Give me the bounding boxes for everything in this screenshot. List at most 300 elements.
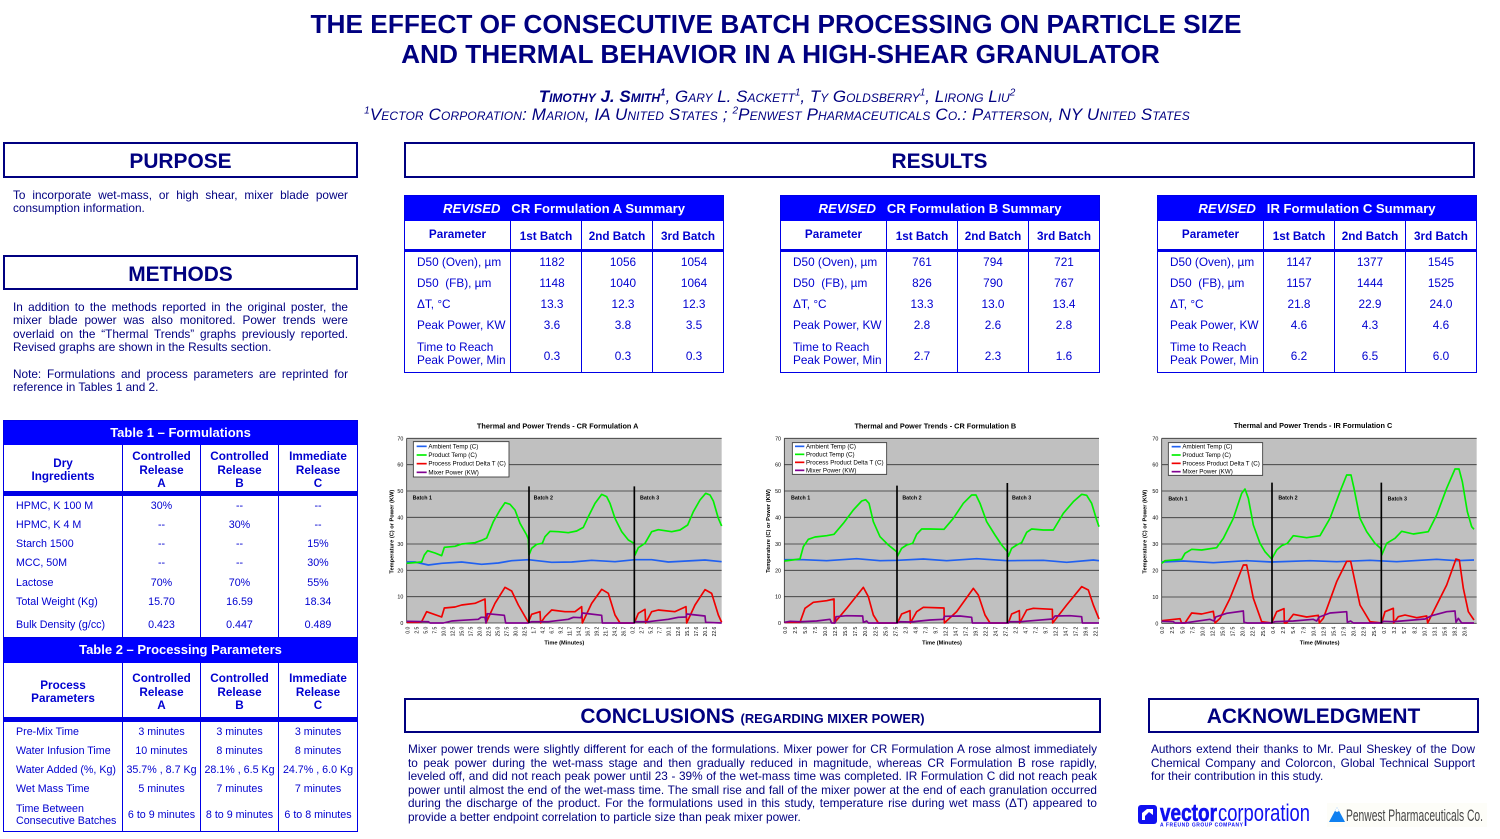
table: IR Formulation C summary: D50 (FB), µm	[1170, 276, 1244, 290]
chart: IR Formulation C: 10.4	[1311, 626, 1317, 636]
chart: CR Formulation B: 20.0	[863, 626, 869, 636]
chart: IR Formulation C: 3.2	[1392, 626, 1398, 634]
table 1: formulations: 30%	[151, 500, 172, 512]
chart: CR Formulation B: 9.7	[1044, 626, 1050, 634]
table 1: formulations: --	[236, 557, 243, 569]
table: IR Formulation C summary: Peak Power, Min	[1170, 353, 1259, 367]
chart: CR Formulation B: 2.3	[903, 626, 909, 634]
table 1: formulations: 16.59	[226, 596, 253, 608]
table: CR Formulation A summary: Peak Power, Min	[417, 353, 506, 367]
chart: CR Formulation A: 0	[400, 621, 403, 627]
chart: CR Formulation A: 5.2	[649, 626, 655, 634]
table: CR Formulation A summary: 1054	[681, 255, 707, 269]
table 1: formulations: 0.447	[226, 618, 253, 630]
chart: IR Formulation C: 60	[1152, 463, 1158, 469]
table: IR Formulation C summary: 1157	[1286, 276, 1312, 290]
table: CR Formulation B summary: 13.4	[1053, 297, 1075, 311]
chart: CR Formulation A: 15.1	[685, 626, 691, 636]
table 1: formulations	[3, 420, 358, 638]
chart: CR Formulation B: 22.1	[1094, 626, 1100, 636]
chart: CR Formulation A: 12.6	[676, 626, 682, 636]
chart: CR Formulation B: 12.5	[833, 626, 839, 636]
chart: CR Formulation A: 12.5	[450, 626, 456, 636]
table 2: processing parameters: C	[314, 699, 322, 712]
table: CR Formulation B summary: Parameter	[805, 228, 862, 241]
chart: CR Formulation A: 24.2	[613, 626, 619, 636]
chart: IR Formulation C: Temperature (C) or Power (KW)	[1142, 490, 1148, 574]
title: THE EFFECT OF CONSECUTIVE BATCH PROCESSING ON PARTICLE SIZE	[311, 9, 1241, 39]
chart: CR Formulation B: 2.5	[793, 626, 799, 634]
chart: CR Formulation B: Batch 2	[902, 495, 922, 501]
chart: IR Formulation C: 12.9	[1321, 626, 1327, 636]
chart: CR Formulation A: 60	[397, 463, 403, 469]
chart: IR Formulation C: Batch 3	[1388, 496, 1407, 502]
chart: CR Formulation B: 17.2	[963, 626, 969, 636]
heading: purpose	[3, 142, 358, 178]
chart: IR Formulation C: 22.9	[1362, 626, 1368, 636]
heading: methods	[3, 255, 358, 290]
text: acknowledgment	[1151, 742, 1475, 783]
chart: IR Formulation C: 8.2	[1412, 626, 1418, 634]
chart: CR Formulation A: 16.7	[586, 626, 592, 636]
table 1: formulations: HPMC, K 100 M	[16, 500, 93, 512]
chart: IR Formulation C: 20.6	[1463, 626, 1469, 636]
chart: IR Formulation C: Ambient Temp (C)	[1182, 444, 1232, 451]
logo: Vector Corporation	[1138, 800, 1310, 828]
chart: IR Formulation C: Mixer Power (KW)	[1182, 469, 1233, 476]
table: IR Formulation C summary: Parameter	[1182, 228, 1239, 241]
chart: CR Formulation B: Time (Minutes)	[922, 640, 962, 646]
table: CR Formulation A summary: Parameter	[429, 228, 486, 241]
chart: CR Formulation B: 0.0	[783, 626, 789, 634]
table: CR Formulation B summary: 761	[912, 255, 932, 269]
chart: IR Formulation C: 5.4	[1291, 626, 1297, 634]
chart: IR Formulation C: Process Product Delta T (C)	[1182, 460, 1260, 467]
chart: CR Formulation A: 30.0	[514, 626, 520, 636]
table: CR Formulation B summary: 2.6	[985, 318, 1001, 332]
chart: CR Formulation A: 15.0	[459, 626, 465, 636]
chart: CR Formulation B: 50	[775, 489, 781, 495]
table: CR Formulation B summary: 794	[983, 255, 1003, 269]
text: methods: Revised graphs are shown in the Results section.	[13, 340, 271, 354]
table 1: formulations: Immediate	[289, 450, 347, 463]
table 1: formulations: 30%	[307, 557, 329, 569]
table: CR Formulation A summary	[404, 195, 724, 373]
table: CR Formulation B summary: Peak Power, Min	[793, 353, 882, 367]
text: acknowledgment: for their contribution in this study.	[1151, 769, 1323, 783]
table: CR Formulation A summary: 3.8	[615, 318, 631, 332]
table: CR Formulation B summary: 1st Batch	[896, 230, 948, 243]
chart: CR Formulation A: Time (Minutes)	[544, 640, 584, 646]
table: CR Formulation A summary: 0.3	[615, 349, 631, 363]
chart: IR Formulation C: Batch 1	[1168, 496, 1188, 502]
table 1: formulations: 15%	[307, 538, 329, 550]
table: CR Formulation A summary: 12.3	[612, 297, 634, 311]
table: IR Formulation C summary	[1157, 195, 1477, 373]
table: CR Formulation B summary: REVISED CR Formulation B Summary	[818, 200, 1062, 216]
table 2: processing parameters: Pre-Mix Time	[16, 726, 79, 738]
table: CR Formulation B summary: 2.8	[1056, 318, 1072, 332]
chart: CR Formulation B: 17.2	[1074, 626, 1080, 636]
table: IR Formulation C summary: Peak Power, KW	[1170, 318, 1259, 332]
chart: IR Formulation C	[1142, 421, 1477, 646]
table: IR Formulation C summary: 24.0	[1430, 297, 1452, 311]
table: CR Formulation B summary: 790	[983, 276, 1003, 290]
chart: IR Formulation C: 5.0	[1180, 626, 1186, 634]
title: AND THERMAL BEHAVIOR IN A HIGH-SHEAR GRANULATOR	[401, 39, 1160, 69]
table: IR Formulation C summary: REVISED IR Formulation C Summary	[1198, 200, 1436, 216]
table 1: formulations: Starch 1500	[16, 538, 74, 550]
table 2: processing parameters: 8 to 9 minutes	[206, 809, 273, 821]
authors and affiliations: Timothy J. Smith1, Gary L. Sackett1, Ty Goldsberry1, Lirong Liu2	[539, 87, 1015, 106]
table: CR Formulation A summary: 1056	[610, 255, 636, 269]
text: conclusions: power until almost the end of the wet-mass time. The small rise and fall of the mixer power at the end of each granulation occurred	[408, 783, 1097, 797]
text: methods: mixer blade power was also monitored. Power trends were	[13, 313, 348, 327]
chart: CR Formulation B: 17.5	[853, 626, 859, 636]
text: purpose: To incorporate wet-mass, or high shear, mixer blade power	[13, 188, 348, 202]
table: CR Formulation A summary: Peak Power, KW	[417, 318, 506, 332]
chart: CR Formulation B: Temperature (C) or Power (KW)	[766, 489, 772, 573]
chart: CR Formulation A: 10	[397, 595, 403, 601]
table: CR Formulation B summary: 2.7	[914, 349, 930, 363]
table: IR Formulation C summary: 1444	[1357, 276, 1383, 290]
table: IR Formulation C summary: 3rd Batch	[1414, 230, 1468, 243]
table: CR Formulation B summary: 826	[912, 276, 932, 290]
heading: methods: METHODS	[128, 263, 233, 286]
chart: CR Formulation A: 5.0	[423, 626, 429, 634]
chart: IR Formulation C: 15.4	[1332, 626, 1338, 636]
chart: CR Formulation A: 17.6	[694, 626, 700, 636]
chart: CR Formulation A: 21.7	[604, 626, 610, 636]
table: CR Formulation B summary: 767	[1054, 276, 1074, 290]
chart: CR Formulation A: Mixer Power (KW)	[428, 469, 479, 476]
chart: IR Formulation C: 25.4	[1372, 626, 1378, 636]
table: IR Formulation C summary: 4.6	[1291, 318, 1307, 332]
table: CR Formulation A summary: ΔT, °C	[417, 296, 451, 310]
chart: IR Formulation C: 12.5	[1210, 626, 1216, 636]
chart: CR Formulation A: 50	[397, 489, 403, 495]
table: CR Formulation A summary: 3rd Batch	[661, 230, 715, 243]
chart: CR Formulation A: 11.7	[568, 626, 574, 636]
heading: results: RESULTS	[892, 150, 987, 173]
chart: IR Formulation C: Time (Minutes)	[1300, 640, 1340, 646]
table 2: processing parameters: 7 minutes	[216, 783, 263, 795]
text: methods: overlaid on the “Thermal Trends” graphs previously reported.	[13, 327, 348, 341]
chart: CR Formulation B: 30	[775, 542, 781, 548]
text: conclusions: provide a better endpoint correlation to particle size than peak mixer power.	[408, 810, 801, 824]
chart: CR Formulation A: 0.0	[405, 626, 411, 634]
table 2: processing parameters: 3 minutes	[295, 726, 341, 738]
table 2: processing parameters: Wet Mass Time	[16, 783, 89, 795]
table 2: processing parameters: 10 minutes	[135, 745, 188, 757]
heading: conclusions: CONCLUSIONS (REGARDING MIXER POWER)	[580, 705, 925, 728]
chart: CR Formulation A: 9.2	[559, 626, 565, 634]
chart: CR Formulation B: 19.7	[973, 626, 979, 636]
chart: CR Formulation B: Process Product Delta T (C)	[806, 459, 884, 466]
text: methods	[13, 300, 348, 394]
chart: IR Formulation C: 7.9	[1301, 626, 1307, 634]
chart: CR Formulation B: Batch 3	[1012, 495, 1031, 501]
table: IR Formulation C summary: 1525	[1428, 276, 1454, 290]
table: IR Formulation C summary: 22.9	[1359, 297, 1381, 311]
chart: IR Formulation C: 5.7	[1402, 626, 1408, 634]
heading: acknowledgment	[1148, 698, 1479, 733]
chart: CR Formulation A: 32.5	[523, 626, 529, 636]
table 2: processing parameters: 35.7% , 8.7 Kg	[126, 764, 197, 776]
chart: CR Formulation B: 22.2	[983, 626, 989, 636]
chart: CR Formulation A: Temperature (C) or Power (KW)	[390, 490, 396, 574]
table 2: processing parameters: 8 minutes	[295, 745, 341, 757]
table: CR Formulation A summary: 1040	[610, 276, 636, 290]
chart: IR Formulation C: 20.0	[1241, 626, 1247, 636]
chart: CR Formulation B: 27.5	[893, 626, 899, 636]
chart: CR Formulation A: 17.5	[468, 626, 474, 636]
chart: CR Formulation A: 10.0	[441, 626, 447, 636]
table 1: formulations: Release	[139, 464, 184, 477]
text: methods: In addition to the methods reported in the original poster, the	[13, 300, 348, 314]
chart: CR Formulation A: 0.2	[631, 626, 637, 634]
table 2: processing parameters: 6 to 9 minutes	[128, 809, 195, 821]
table 2: processing parameters: Controlled	[210, 672, 269, 685]
chart: IR Formulation C: 0.4	[1271, 626, 1277, 634]
table 1: formulations: --	[314, 519, 322, 531]
chart: CR Formulation B: 14.7	[1064, 626, 1070, 636]
table 2: processing parameters: 7 minutes	[295, 783, 341, 795]
heading: acknowledgment: ACKNOWLEDGMENT	[1207, 705, 1420, 728]
chart: IR Formulation C: 25.0	[1261, 626, 1267, 636]
table 1: formulations: 15.70	[148, 596, 175, 608]
table: CR Formulation B summary: 2nd Batch	[965, 230, 1021, 243]
table: CR Formulation A summary: 13.3	[541, 297, 563, 311]
table 1: formulations: Controlled	[210, 450, 269, 463]
chart: CR Formulation A: 25.0	[496, 626, 502, 636]
chart: CR Formulation A: 4.2	[541, 626, 547, 634]
table 2: processing parameters: Release	[139, 686, 184, 699]
chart: IR Formulation C: Thermal and Power Trends - IR Formulation C	[1234, 421, 1393, 430]
table 1: formulations: A	[157, 477, 166, 490]
table 1: formulations: --	[158, 557, 165, 569]
table 2: processing parameters: Consecutive Batches	[16, 815, 116, 827]
table 2: processing parameters: 8 minutes	[216, 745, 263, 757]
text: purpose: consumption information.	[13, 201, 145, 215]
table 2: processing parameters	[3, 637, 358, 832]
table 1: formulations: 18.34	[305, 596, 331, 608]
text: methods: reference in Tables 1 and 2.	[13, 380, 158, 394]
heading: conclusions	[404, 698, 1101, 733]
chart: IR Formulation C: 10	[1152, 595, 1158, 601]
chart: CR Formulation A: 10.1	[667, 626, 673, 636]
chart: CR Formulation A: 20	[397, 568, 403, 574]
table 1: formulations: 30%	[229, 519, 250, 531]
table: IR Formulation C summary: 6.0	[1433, 349, 1449, 363]
table: CR Formulation B summary: D50 (Oven), µm	[793, 255, 877, 269]
chart: CR Formulation B: Ambient Temp (C)	[806, 443, 856, 450]
chart: CR Formulation B: Mixer Power (KW)	[806, 467, 856, 474]
chart: IR Formulation C: 40	[1152, 516, 1158, 522]
chart: CR Formulation B: 27.2	[1004, 626, 1010, 636]
chart: IR Formulation C: 18.2	[1453, 626, 1459, 636]
chart: IR Formulation C: 50	[1152, 489, 1158, 495]
table 1: formulations: 70%	[151, 577, 172, 589]
chart: CR Formulation B: 10	[775, 595, 781, 601]
chart: CR Formulation B: 14.7	[953, 626, 959, 636]
chart: IR Formulation C: 20.4	[1352, 626, 1358, 636]
chart: IR Formulation C: 2.5	[1170, 626, 1176, 634]
table 1: formulations: 70%	[229, 577, 250, 589]
table 1: formulations: Table 1 – Formulations	[110, 424, 251, 440]
table: IR Formulation C summary: Time to Reach	[1170, 340, 1246, 354]
chart: CR Formulation A: Ambient Temp (C)	[428, 443, 478, 450]
chart: CR Formulation A: 22.6	[712, 626, 718, 636]
table 1: formulations: --	[158, 519, 165, 531]
table: CR Formulation A summary: 3.6	[544, 318, 560, 332]
table: CR Formulation B summary: 721	[1054, 255, 1074, 269]
table: IR Formulation C summary: 6.5	[1362, 349, 1378, 363]
table 1: formulations: MCC, 50M	[16, 557, 67, 569]
chart: IR Formulation C: 15.6	[1443, 626, 1449, 636]
chart: CR Formulation A: Batch 1	[413, 495, 432, 501]
table 2: processing parameters: 6 to 8 minutes	[284, 809, 352, 821]
table 2: processing parameters: Table 2 – Processing Parameters	[79, 642, 282, 657]
chart: CR Formulation A: 1.7	[532, 626, 538, 634]
heading: results	[404, 142, 1475, 178]
chart: CR Formulation A: 2.5	[414, 626, 420, 634]
table: IR Formulation C summary: 1545	[1428, 255, 1454, 269]
chart: CR Formulation A: Thermal and Power Trends - CR Formulation A	[477, 422, 639, 431]
chart: CR Formulation B: 15.0	[843, 626, 849, 636]
chart: CR Formulation B: 5.0	[803, 626, 809, 634]
table: CR Formulation A summary: 0.3	[686, 349, 702, 363]
table: CR Formulation B summary: Time to Reach	[793, 340, 869, 354]
table 2: processing parameters: Parameters	[31, 692, 95, 705]
table: CR Formulation A summary: 12.3	[683, 297, 706, 311]
table: CR Formulation B summary: 13.3	[911, 297, 933, 311]
chart: CR Formulation A: Product Temp (C)	[428, 452, 477, 459]
chart: IR Formulation C: 20	[1152, 568, 1158, 574]
chart: CR Formulation B: 0	[778, 621, 781, 627]
chart: CR Formulation A: 14.2	[577, 626, 583, 636]
table 2: processing parameters: Controlled	[132, 672, 191, 685]
chart: CR Formulation B: 22.5	[873, 626, 879, 636]
chart: IR Formulation C: 70	[1152, 436, 1158, 442]
chart: IR Formulation C: 0.7	[1382, 626, 1388, 634]
chart: CR Formulation B: 4.8	[913, 626, 919, 634]
table: IR Formulation C summary: 2nd Batch	[1342, 230, 1398, 243]
table: CR Formulation A summary: REVISED CR Formulation A Summary	[443, 200, 685, 216]
table 2: processing parameters: 24.7% , 6.0 Kg	[283, 764, 353, 776]
table 1: formulations: --	[236, 500, 243, 512]
table 2: processing parameters: Water Infusion Time	[16, 745, 111, 757]
chart: IR Formulation C: 0	[1155, 621, 1158, 627]
chart: CR Formulation B	[766, 422, 1100, 646]
chart: CR Formulation A: 20.0	[477, 626, 483, 636]
chart: CR Formulation A: 70	[397, 436, 403, 442]
chart: CR Formulation B: 60	[775, 463, 781, 469]
table 1: formulations: --	[236, 538, 243, 550]
chart: IR Formulation C: Product Temp (C)	[1182, 452, 1231, 459]
table: CR Formulation A summary: 1064	[681, 276, 707, 290]
chart: CR Formulation B: 70	[775, 436, 781, 442]
chart: CR Formulation A: 40	[397, 515, 403, 521]
chart: IR Formulation C: 15.0	[1221, 626, 1227, 636]
table: CR Formulation B summary: ΔT, °C	[793, 296, 827, 310]
authors and affiliations	[364, 87, 1190, 124]
table 2: processing parameters: 3 minutes	[138, 726, 185, 738]
table 1: formulations: Controlled	[132, 450, 191, 463]
chart: CR Formulation A: Batch 3	[640, 495, 659, 501]
title	[310, 9, 1241, 69]
chart: CR Formulation A: 7.5	[432, 626, 438, 634]
chart: CR Formulation A: 27.5	[505, 626, 511, 636]
chart: CR Formulation B: 20	[775, 568, 781, 574]
table 1: formulations: Lactose	[16, 577, 53, 589]
table: IR Formulation C summary: 6.2	[1291, 349, 1307, 363]
table: CR Formulation B summary: 3rd Batch	[1037, 230, 1091, 243]
table 1: formulations: --	[314, 500, 322, 512]
chart: IR Formulation C: Batch 2	[1278, 495, 1298, 501]
table: CR Formulation A summary: 1148	[539, 276, 565, 290]
text: methods: Note: Formulations and process parameters are reprinted for	[13, 367, 348, 381]
table 1: formulations: Release	[296, 464, 340, 477]
table: CR Formulation A summary: Time to Reach	[417, 340, 493, 354]
table 2: processing parameters: Immediate	[289, 672, 347, 685]
table 2: processing parameters: Water Added (%, Kg)	[16, 764, 116, 776]
table: CR Formulation B summary: Peak Power, KW	[793, 318, 882, 332]
chart: IR Formulation C: 10.0	[1200, 626, 1206, 636]
chart: CR Formulation B: 24.7	[994, 626, 1000, 636]
table 2: processing parameters: 3 minutes	[216, 726, 263, 738]
chart: CR Formulation B: Thermal and Power Trends - CR Formulation B	[854, 422, 1016, 431]
chart: IR Formulation C: 22.5	[1251, 626, 1257, 636]
table: CR Formulation B summary	[780, 195, 1100, 373]
chart: CR Formulation A: 20.1	[703, 626, 709, 636]
chart: CR Formulation B: 12.2	[1054, 626, 1060, 636]
chart: CR Formulation B: 9.7	[933, 626, 939, 634]
table: IR Formulation C summary: 4.3	[1362, 318, 1378, 332]
table 1: formulations: B	[235, 477, 244, 490]
table 1: formulations: Dry	[53, 457, 73, 470]
heading: purpose: PURPOSE	[129, 150, 232, 173]
text: conclusions: leveled off, and did not reach peak power until 23 - 39% of the wet-mass time was completed. IR Formulation C did not reach peak	[408, 769, 1097, 783]
chart: CR Formulation B: 7.5	[813, 626, 819, 634]
table: IR Formulation C summary: 1st Batch	[1273, 230, 1325, 243]
chart: CR Formulation B: 2.2	[1014, 626, 1020, 634]
text: conclusions: during the discharge of the product. For the formulations used in this study, temperature rise during wet mass (ΔT) appeared to	[408, 796, 1097, 810]
table 1: formulations: 0.489	[305, 618, 331, 630]
table 2: processing parameters: Process	[40, 679, 86, 692]
table: CR Formulation B summary: 1.6	[1056, 349, 1072, 363]
text: conclusions: to peak power during the wet-mass stage and then gradually reduced in magnitude, whereas CR Formulation B rose rapidly,	[408, 756, 1097, 770]
text: purpose	[13, 188, 348, 215]
chart: IR Formulation C: 17.5	[1231, 626, 1237, 636]
chart: CR Formulation A: 6.7	[550, 626, 556, 634]
chart: CR Formulation A	[390, 422, 722, 646]
chart: CR Formulation B: 7.3	[923, 626, 929, 634]
table: CR Formulation B summary: 2.8	[914, 318, 930, 332]
table: CR Formulation A summary: 1182	[539, 255, 565, 269]
table: CR Formulation B summary: 13.0	[982, 297, 1004, 311]
table: IR Formulation C summary: 1377	[1357, 255, 1383, 269]
chart: CR Formulation A: 7.7	[658, 626, 664, 634]
table 1: formulations: Bulk Density (g/cc)	[16, 618, 105, 630]
text: acknowledgment: Chemical Company and Colorcon, Global Technical Support	[1151, 756, 1475, 770]
chart: IR Formulation C: 7.5	[1190, 626, 1196, 634]
table 1: formulations: Ingredients	[32, 470, 94, 483]
text: acknowledgment: Authors extend their thanks to Mr. Paul Sheskey of the Dow	[1151, 742, 1475, 756]
table: IR Formulation C summary: 4.6	[1433, 318, 1449, 332]
chart: IR Formulation C: 0.0	[1160, 626, 1166, 634]
chart: CR Formulation B: 19.6	[1084, 626, 1090, 636]
